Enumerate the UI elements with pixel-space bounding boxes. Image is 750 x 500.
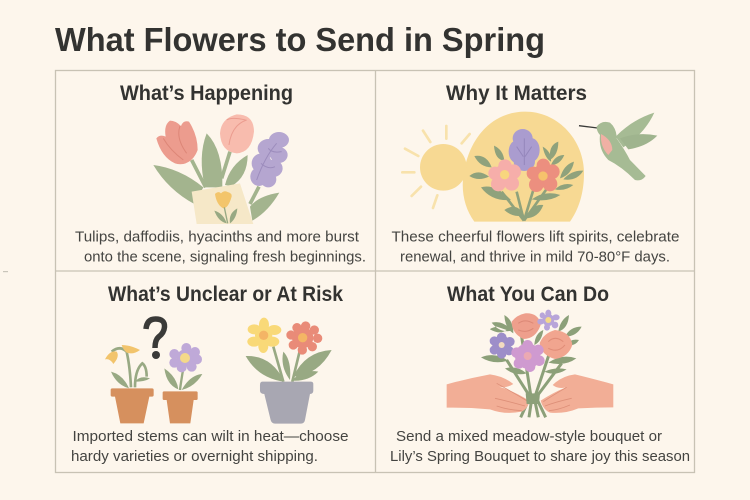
heading: what's happening: What’s Happening <box>120 82 293 105</box>
text block: why it matters: renewal, and thrive in mild 70-80°F days. <box>400 248 670 266</box>
text block: why it matters: These cheerful flowers lift spirits, celebrate <box>392 228 680 246</box>
text block: what's happening: onto the scene, signaling fresh beginnings. <box>84 248 366 266</box>
heading: what you can do: What You Can Do <box>447 283 609 306</box>
text block: what's unclear: Imported stems can wilt in heat—choose <box>72 428 348 445</box>
text block: why it matters <box>392 228 680 266</box>
icon: wilting daffodil in pot <box>105 345 154 423</box>
icon: question mark dot <box>152 351 160 359</box>
text block: what you can do: Send a mixed meadow-style bouquet or <box>396 428 662 445</box>
icon: healthy flowers in grey pot <box>246 318 332 424</box>
text block: what you can do <box>390 428 690 465</box>
text block: what's happening <box>75 228 366 266</box>
icon: sun with bouquet <box>402 112 584 222</box>
icon: bouquet in two hands <box>447 310 613 417</box>
icon: question mark <box>146 319 165 348</box>
icon: tulip and lavender bouquet <box>153 114 289 224</box>
panel: what's unclear or at risk <box>71 283 348 465</box>
grid frame <box>56 70 694 472</box>
text block: what's happening: Tulips, daffodiis, hyacinths and more burst <box>75 228 360 246</box>
heading: why it matters: Why It Matters <box>446 82 587 105</box>
heading: what's unclear: What’s Unclear or At Risk <box>108 283 343 306</box>
panel: why it matters <box>392 82 680 266</box>
icon: hummingbird <box>579 113 657 180</box>
text block: what's unclear <box>71 428 348 465</box>
title: What Flowers to Send in Spring <box>55 22 545 59</box>
icon: purple flower in pot <box>163 343 202 423</box>
text block: what's unclear: hardy varieties or overnight shipping. <box>71 448 318 465</box>
panel: what's happening <box>75 82 366 266</box>
panel: what you can do <box>390 283 690 465</box>
text block: what you can do: Lily’s Spring Bouquet to share joy this season <box>390 448 690 465</box>
